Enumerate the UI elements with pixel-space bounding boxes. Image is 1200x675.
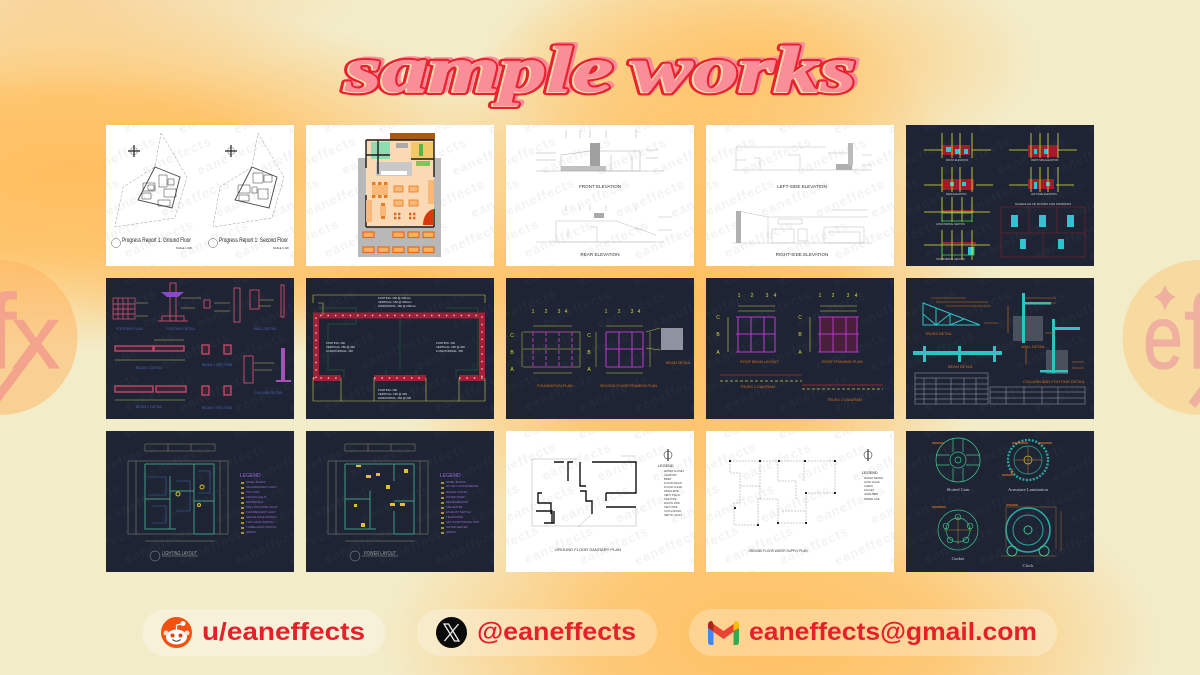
yellow dimension lines <box>313 295 485 401</box>
left side logo badge <box>0 260 78 415</box>
ground floor plan drawing <box>112 133 187 248</box>
footing plan grid <box>113 298 135 319</box>
legend: OUTLET CONVENIENCE <box>446 484 478 488</box>
white spec notes: FOOTING: 150 <box>436 341 455 345</box>
layout title text: LIGHTING LAYOUT <box>162 551 197 557</box>
schedule title and captions: RIGHT-SIDE ELEVATION <box>1031 159 1059 162</box>
legend <box>240 473 278 534</box>
beam detail <box>913 346 1002 362</box>
dimension lines <box>728 306 857 352</box>
mesh beam detail <box>661 328 683 350</box>
grid labels: B <box>716 332 720 338</box>
grid labels <box>510 309 641 373</box>
dimension frame <box>328 444 428 541</box>
panel: red reinforced wall plan <box>306 278 494 419</box>
foundation plan grid <box>522 326 580 373</box>
grid labels <box>716 293 858 356</box>
schedule title and captions: LONGITUDINAL SECTION <box>936 223 965 226</box>
legend: PANEL BOARD <box>446 480 466 484</box>
part labels: Armature Lamination <box>1008 487 1049 492</box>
legend: TELEPHONE <box>446 515 463 519</box>
title: sample <box>343 34 612 107</box>
blue captions: BEAM 1 SECTION <box>202 363 233 367</box>
orange plan captions: FOUNDATION PLAN <box>537 384 573 388</box>
plan outline <box>730 461 835 525</box>
legend: PANEL BOARD <box>246 480 266 484</box>
entry wedge <box>423 209 434 225</box>
layout title <box>150 551 198 561</box>
grid labels: 1 <box>819 293 822 299</box>
grid labels: 4 <box>855 293 858 299</box>
plan caption: GROUND FLOOR WATER SUPPLY PLAN <box>748 549 808 553</box>
legend <box>658 464 685 517</box>
armature lamination <box>1008 440 1048 480</box>
walls <box>366 140 434 227</box>
grid labels: 2 <box>545 309 548 315</box>
panel: sanitary plan <box>506 431 694 572</box>
legend: CHECK <box>864 484 873 488</box>
orange dimension notes <box>932 443 1052 507</box>
legend: VENT STACK <box>664 493 680 497</box>
reddit text: u/eaneffects <box>202 618 365 646</box>
title: works <box>630 34 855 107</box>
orange plan captions <box>537 361 691 388</box>
white spec notes: LONGITUDINAL: 150 <box>326 349 353 353</box>
legend: WALL MOUNTED LIGHT <box>246 505 278 509</box>
legend: CATCH BASIN <box>664 509 681 513</box>
yellow dimension lines <box>924 133 1077 260</box>
schedule title and captions: LEFT-SIDE ELEVATION <box>1031 193 1057 196</box>
roof framing plan <box>818 317 859 352</box>
room walls <box>345 464 414 534</box>
legend: WATER METER <box>864 476 883 480</box>
legend: RANGE OUTLET <box>446 490 468 494</box>
title <box>343 32 859 107</box>
foundation magenta beams <box>533 332 572 367</box>
green and yellow rooms <box>371 142 434 166</box>
title: works <box>630 34 855 107</box>
left side logo badge: x <box>12 288 60 388</box>
grid labels: 2 <box>832 293 835 299</box>
legend: WATER CLOSET <box>664 469 685 473</box>
schedule tables <box>915 373 1085 404</box>
grid labels: A <box>798 350 802 356</box>
legend: LEGEND <box>658 464 674 468</box>
small four seat tables <box>394 214 417 218</box>
grid labels: B <box>587 350 591 356</box>
grid labels: 4 <box>638 309 641 315</box>
blue captions: BEAM 1 DETAIL <box>136 366 162 370</box>
green outlines <box>318 308 478 378</box>
legend: WASTE PIPE <box>664 501 680 505</box>
terrace tables <box>363 232 434 252</box>
left side elevation label: LEFT-SIDE ELEVATION <box>777 184 827 189</box>
legend: DRAIN PIPE <box>664 489 679 493</box>
grid labels: A <box>587 367 591 373</box>
legend: WATER LINE <box>864 497 880 501</box>
legend: FLUORESCENT LIGHT <box>246 510 276 514</box>
rear elevation label: REAR ELEVATION <box>580 252 620 257</box>
layout title <box>350 551 398 561</box>
panel: motor part drawings <box>906 431 1094 572</box>
white spec notes: HORIZONTAL: 150 @ 200mm <box>378 304 416 308</box>
grid labels: 3 <box>558 309 561 315</box>
grid labels: 2 <box>618 309 621 315</box>
white spec notes: FOOTING: 150 @ 200mm <box>378 296 411 300</box>
cyan openings <box>946 147 1050 255</box>
panel: lighting layout <box>106 431 294 572</box>
legend: LEGEND <box>440 473 461 479</box>
blue captions: BEAM 2 SECTION <box>202 406 233 410</box>
grid labels: B <box>510 350 514 356</box>
grid labels: 2 <box>751 293 754 299</box>
blue captions: WALL DETAIL <box>254 327 277 331</box>
second floor plan drawing <box>208 133 284 248</box>
terrace slab <box>358 158 441 257</box>
plan captions: SCALE 1:100 <box>273 246 289 250</box>
white spec notes: FOOTING: 150 <box>326 341 345 345</box>
pill: reddit handle <box>142 609 385 656</box>
plan captions: Progress Report 1: Ground Floor <box>122 238 191 244</box>
grid labels: 4 <box>565 309 568 315</box>
legend: AIR HEATER <box>446 505 463 509</box>
pill: x handle <box>417 609 657 656</box>
panel: front and rear elevation <box>506 125 694 266</box>
legend: LEGEND <box>862 471 878 475</box>
footing detail <box>1013 293 1080 374</box>
icon: reddit <box>161 617 192 648</box>
panel: restaurant coloured floor plan <box>306 125 494 266</box>
panel: foundation and second floor framing plan <box>506 278 694 419</box>
icon: gmail <box>708 621 739 645</box>
legend markers <box>441 483 444 533</box>
clock <box>1001 507 1061 556</box>
title: sample <box>347 32 616 105</box>
light fixtures <box>176 485 204 506</box>
blue captions: FOOTING PLAN <box>116 327 143 331</box>
slotted cam <box>936 438 980 482</box>
column and footing section <box>158 283 284 322</box>
grid labels: A <box>716 350 720 356</box>
orange plan captions: SECOND FLOOR FRAMING PLAN <box>600 384 657 388</box>
yellow leaders <box>115 298 274 400</box>
panel: water supply plan <box>706 431 894 572</box>
legend: WIRING <box>446 530 456 534</box>
legend: WIRING <box>246 530 256 534</box>
panel: dark elevations and door schedule <box>906 125 1094 266</box>
orange captions: BEAM DETAIL <box>948 365 973 369</box>
right side elevation label: RIGHT-SIDE ELEVATION <box>776 252 828 257</box>
part labels: Gasket <box>952 556 965 561</box>
grid labels: 3 <box>847 293 850 299</box>
legend: PIN LIGHT <box>246 490 260 494</box>
grid labels: 3 <box>766 293 769 299</box>
part labels: Clock <box>1023 563 1034 568</box>
legend: FAUCET <box>864 488 875 492</box>
icon: x logo <box>436 617 467 648</box>
schedule title and captions: FRONT ELEVATION <box>946 159 968 162</box>
legend: EXHAUST SWITCH <box>446 510 471 514</box>
orange captions: TRUSS 1 DIAGRAM <box>740 385 775 389</box>
truss detail <box>923 303 980 325</box>
orange captions: ROOF BEAM LAYOUT <box>740 360 779 364</box>
orange captions: COLUMN AND FOOTING DETAIL <box>1023 380 1085 384</box>
legend: CEILING LIGHT <box>246 495 266 499</box>
legend: WATER HEATER <box>446 525 468 529</box>
gasket <box>938 510 978 550</box>
right side logo badge <box>1122 260 1200 415</box>
legend: FLOOR CLEAN <box>664 485 682 489</box>
black walls <box>536 462 636 523</box>
orange captions <box>740 360 863 402</box>
wiring and outlets <box>354 465 408 527</box>
white spec notes: VERTICAL: 150 @ 200mm <box>378 300 412 304</box>
panel: roof beam layout and truss diagrams <box>706 278 894 419</box>
legend: TWO-GANG SWITCH <box>246 520 274 524</box>
legend: INCANDESCENT LIGHT <box>246 485 277 489</box>
panel: progress report floor plans <box>106 125 294 266</box>
green sections <box>942 213 974 255</box>
wiring <box>148 471 210 523</box>
x handle text: @eaneffects <box>477 618 636 646</box>
title: sample <box>344 34 614 106</box>
kitchen counter <box>376 143 412 176</box>
panel: truss, beam and footing details <box>906 278 1094 419</box>
grid labels: 1 <box>532 309 535 315</box>
orange captions: ROOF FRAMING PLAN <box>822 360 863 364</box>
schedule title and captions <box>936 159 1071 261</box>
schedule title and captions: SCHEDULE OF DOORS AND WINDOWS <box>1015 202 1071 206</box>
front elevation drawing <box>536 130 664 171</box>
legend: FLOOR DRAIN <box>664 481 682 485</box>
legend: BIDET <box>664 477 672 481</box>
red wall blocks <box>942 145 1058 245</box>
legend: LAVATORY <box>664 473 677 477</box>
white spec notes: FOOTING: 150 <box>378 388 397 392</box>
plan caption: GROUND FLOOR SANITARY PLAN <box>555 548 622 552</box>
front elevation label: FRONT ELEVATION <box>579 184 621 189</box>
legend: GATE VALVE <box>864 480 880 484</box>
grid labels: 1 <box>738 293 741 299</box>
white spec notes: VERTICAL: 150 @ 200 <box>326 345 355 349</box>
long table and banquettes <box>366 180 434 222</box>
white spec notes: VERTICAL: 150 @ 200 <box>378 392 407 396</box>
legend <box>440 473 480 534</box>
panel: power layout <box>306 431 494 572</box>
plan captions <box>122 238 289 250</box>
orange plan captions: BEAM DETAIL <box>666 361 691 365</box>
tall purple column <box>244 348 291 383</box>
grid labels: C <box>716 315 720 321</box>
legend: LEGEND <box>240 473 261 479</box>
indoor tables <box>394 186 418 206</box>
purple cap <box>161 292 184 297</box>
white spec notes: VERTICAL: 150 @ 200 <box>436 345 465 349</box>
reinforced wall band <box>313 316 485 378</box>
orange annotations <box>931 298 1084 368</box>
dimension frame <box>128 444 228 541</box>
plan captions: SCALE 1:100 <box>176 246 192 250</box>
legend: AIR CONDITIONING UNIT <box>446 520 480 524</box>
title: works <box>632 34 856 106</box>
grid labels: C <box>510 333 514 339</box>
layout title text: POWER LAYOUT <box>364 551 396 557</box>
door schedule <box>1001 207 1085 257</box>
schedule glyphs <box>1011 215 1074 249</box>
grid labels: 1 <box>605 309 608 315</box>
right side logo badge: e <box>1143 288 1183 388</box>
beam sections <box>115 345 231 395</box>
blue captions: BEAM 2 DETAIL <box>136 405 162 409</box>
white spec notes: LONGITUDINAL: 150 <box>436 349 463 353</box>
schedule title and captions: REAR ELEVATION <box>946 193 967 196</box>
legend: VENT PIPE <box>664 505 678 509</box>
orange seating <box>372 182 388 219</box>
room walls <box>145 464 214 534</box>
roof beam layout grid <box>736 317 775 352</box>
roof strip <box>390 133 435 140</box>
orange captions: TRUSS 2 DIAGRAM <box>827 398 862 402</box>
panel: structural footing details <box>106 278 294 419</box>
compass <box>864 449 872 461</box>
legend: HOSE BIBB <box>864 492 878 496</box>
title: works <box>634 32 859 105</box>
orange captions <box>925 332 1085 384</box>
blue captions <box>116 327 283 410</box>
grid labels: B <box>798 332 802 338</box>
left side elevation drawing <box>732 143 872 170</box>
second floor framing magenta beams <box>606 332 643 367</box>
column markers <box>729 460 836 526</box>
part labels <box>947 487 1049 568</box>
legend <box>862 471 883 501</box>
blue captions: FOOTING DETAIL <box>166 327 196 331</box>
grid labels: 3 <box>631 309 634 315</box>
legend: SEPTIC VAULT <box>664 513 682 517</box>
grid labels: 4 <box>774 293 777 299</box>
legend markers <box>241 483 244 533</box>
legend: REFRIGERATOR <box>446 500 468 504</box>
title: sample <box>343 34 612 107</box>
white spec notes: HORIZONTAL: 150 @ 200 <box>378 396 412 400</box>
grid labels: A <box>510 367 514 373</box>
orange captions: WALL DETAIL <box>1021 345 1045 349</box>
legend: DOWNLIGHT <box>246 500 263 504</box>
grid labels: C <box>798 315 802 321</box>
white spec notes <box>326 296 465 400</box>
blue captions: COLUMN DETAIL <box>254 391 283 395</box>
legend: SOIL PIPE <box>664 497 677 501</box>
email text: eaneffects@gmail.com <box>749 618 1037 646</box>
legend: WATER PUMP <box>446 495 465 499</box>
schedule title and captions: TRANSVERSAL SECTION <box>936 258 965 261</box>
interior floor <box>366 140 434 227</box>
pill: email <box>689 609 1057 656</box>
right side elevation drawing <box>732 210 872 243</box>
legend: THREE-GANG SWITCH <box>246 525 276 529</box>
framing dimensions <box>596 326 660 373</box>
light plan lines <box>532 456 636 527</box>
part labels: Slotted Cam <box>947 487 970 492</box>
compass <box>664 449 672 461</box>
rear elevation drawing <box>536 205 672 242</box>
orange captions: TRUSS DETAIL <box>925 332 952 336</box>
panel: side elevations <box>706 125 894 266</box>
grid labels: C <box>587 333 591 339</box>
legend: SINGLE-POLE SWITCH <box>246 515 276 519</box>
wall dots <box>313 316 485 378</box>
truss diagrams <box>720 375 883 389</box>
